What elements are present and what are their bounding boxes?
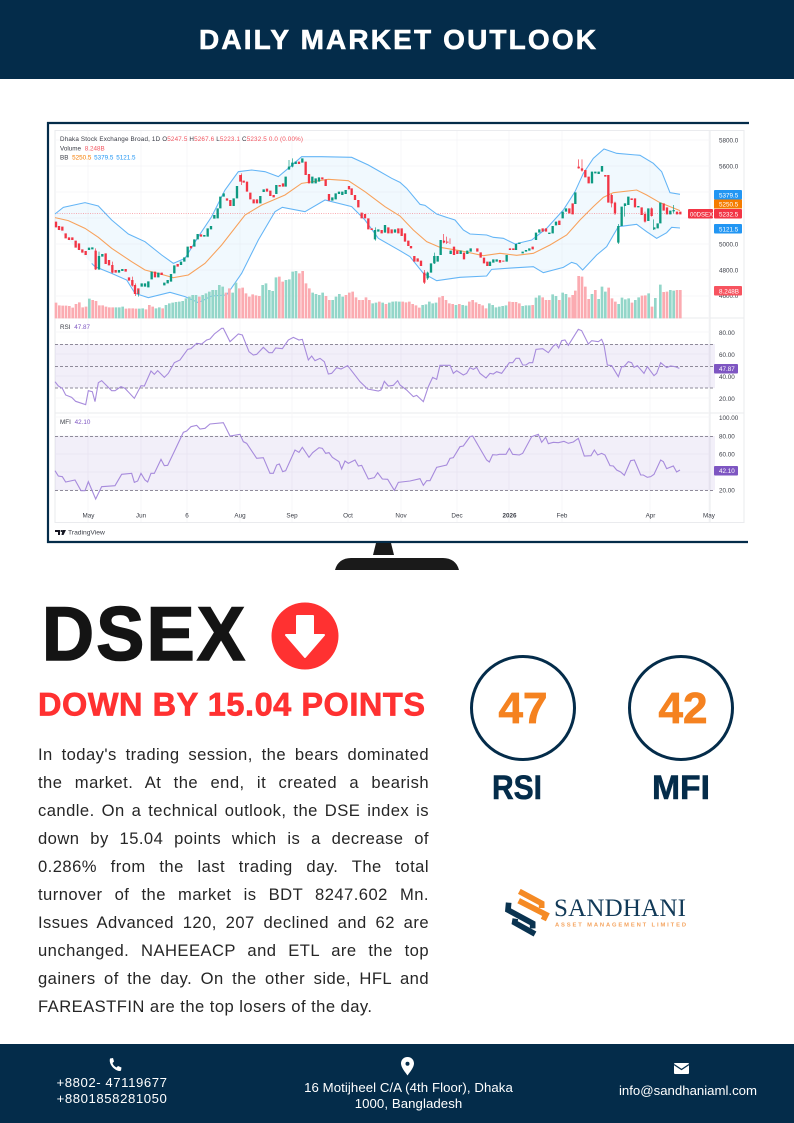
MFI pane [55,423,715,499]
RSI line [55,328,679,405]
time axis labels: Aug [234,512,246,520]
chart legend [60,136,303,426]
market commentary: In today's trading session, the bears dominated [38,744,429,764]
market commentary: candle. On a technical outlook, the DSE index is [38,800,429,820]
price axis labels: 20.00 [719,396,735,403]
axis value tags [688,190,742,476]
price axis labels: 4600.0 [719,293,739,300]
MFI indicator: 42 [659,684,707,733]
market commentary: the market. At the end, it created a bearish [38,772,429,792]
chart legend: MFI 42.10 [60,419,91,426]
axis value tags: 5379.5 [719,192,739,199]
time axis labels: Oct [343,512,353,520]
icon: location pin [401,1057,414,1076]
time axis labels [83,512,716,520]
icon: red down arrow [272,602,338,670]
price axis labels: 4800.0 [719,268,739,274]
RSI indicator [470,655,576,807]
monitor frame [47,122,749,543]
chart panel grid [55,130,744,522]
chart legend: Volume 8.248B [60,146,105,152]
axis value tags: 8.248B [719,288,739,295]
price axis labels: 20.00 [719,488,735,494]
header banner [0,0,794,79]
axis value tags: 5250.5 [719,202,739,208]
market commentary: Issues Advanced 120, 207 declined and 62 are [38,912,429,932]
contact: phone numbers: +8802- 47119677 [56,1075,168,1090]
price pane: bollinger bands, candles, volume [55,149,680,318]
chart monitor [46,122,749,570]
axis value tags: 5232.5 [719,211,739,218]
contact: phone numbers [56,1075,168,1106]
market commentary: gainers of the day. On the other side, HFL and [38,968,429,988]
monitor stand [335,543,459,570]
MFI line [55,423,680,499]
time axis labels: Sep [286,512,298,520]
footer [0,1044,794,1123]
bollinger band fill [55,149,680,303]
contact: address: 16 Motijheel C/A (4th Floor), Dhaka [304,1080,513,1095]
price axis labels: 5800.0 [719,138,739,144]
time axis labels: 6 [185,512,189,520]
volume bars [56,271,680,318]
time axis labels: Feb [557,512,568,520]
RSI indicator: RSI [492,769,542,807]
Sandhani logo: SANDHANI [554,895,686,922]
price axis labels: 80.00 [719,330,735,337]
RSI indicator: 47 [499,684,547,733]
Sandhani logo: ASSET MANAGEMENT LIMITED [555,922,686,928]
axis value tags: 00DSEX [690,212,713,218]
axis value tags: 42.10 [719,468,735,475]
bollinger basis line [55,179,680,278]
chart legend: Dhaka Stock Exchange Broad, 1D O5247.5 H5267.6 L5223.1 C5232.5 0.0 (0.00%) [60,136,303,143]
chart legend: RSI 47.87 [60,324,91,331]
market commentary [38,744,429,1016]
market commentary: FAREASTFIN are the top losers of the day. [38,996,372,1016]
price axis labels: 80.00 [719,434,735,440]
title: DAILY MARKET OUTLOOK [199,24,596,55]
price line [55,213,680,215]
icon: phone [110,1058,122,1071]
MFI indicator [628,655,734,807]
time axis labels: Jun [136,512,147,520]
contact: address: 1000, Bangladesh [355,1096,462,1111]
time axis labels: Apr [646,512,655,520]
chart image content [55,130,744,537]
candlesticks [56,158,680,297]
market commentary: turnover of the market is BDT 8247.602 Mn. [38,884,429,904]
TradingView mark: TradingView [68,530,105,537]
price axis labels: 5600.0 [719,164,739,170]
price axis labels: 100.00 [719,415,739,422]
price axis labels: 60.00 [719,452,735,458]
contact: email: info@sandhaniaml.com [619,1083,757,1098]
Sandhani logo [505,888,686,936]
market commentary: down by 15.04 points which is a decrease of [38,828,429,848]
market commentary: unchanged. NAHEEACP and ETL are the top [38,940,429,960]
time axis labels: Nov [395,512,407,520]
bollinger upper and lower lines [55,149,680,303]
price axis labels: 5000.0 [719,242,739,248]
time axis labels: May [83,512,95,520]
chart legend: BB 5250.5 5379.5 5121.5 [60,154,136,162]
contact: phone numbers: +8801858281050 [57,1091,167,1106]
time axis labels: 2026 [502,512,517,520]
RSI pane [55,328,715,405]
contact: address [304,1080,513,1111]
icon: envelope [674,1063,689,1074]
price axis labels: 60.00 [719,352,735,359]
axis value tags: 5121.5 [719,226,739,233]
MFI indicator: MFI [652,769,710,807]
axis value tags: 47.87 [719,366,735,373]
time axis labels: May [703,512,716,520]
price axis labels: 40.00 [719,374,735,381]
time axis labels: Dec [451,512,463,520]
price axis labels [719,138,739,494]
down by points subheading: DOWN BY 15.04 POINTS [38,686,425,722]
market commentary: 0.286% from the last trading day. The total [38,856,429,876]
